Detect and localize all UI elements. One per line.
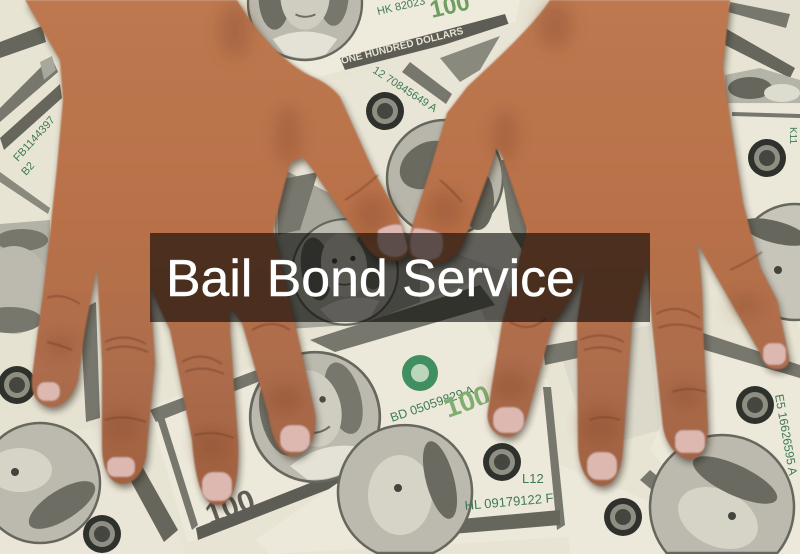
top bill [228,0,520,78]
lower centre bill [255,377,570,554]
lower centre bill: HL 09179122 F [464,490,554,513]
left hand shading [44,2,390,461]
title: Bail Bond Service [166,249,575,307]
left hand knuckle creases [47,175,378,438]
central bill: 100 [440,379,494,424]
lower centre bill: L12 [522,471,544,486]
right hand knuckle creases [440,180,762,420]
left hand fingernails [37,224,408,501]
top-left bills: B2 [19,160,37,178]
second bill with seal: 12 70845649 A [370,64,440,115]
central bill: BD 05059829 A [388,383,476,425]
right upper bills: K11 [787,127,798,144]
top bill: ONE HUNDRED DOLLARS [340,26,465,67]
under-thumb bill [275,165,520,332]
central bill [148,283,525,543]
top-left bills [0,26,62,300]
right upper bills [725,0,800,330]
portrait: lower right [650,435,794,554]
lower right bills [543,325,800,554]
lower right bills: E5 16626595 A [772,393,800,476]
left hand [25,0,408,505]
portrait: between thumbs [387,120,503,236]
right hand shading [427,1,761,443]
second bill with seal [300,20,530,300]
right hand fingernails [410,228,786,480]
right hand [408,0,789,486]
portrait: bottom left [0,423,102,543]
bottom-left bill [0,423,185,554]
central bill: 100 [201,483,259,532]
title band [150,233,650,322]
portrait: lower centre [338,425,472,553]
top-left bills: FB1144397 [11,114,58,164]
left middle bill with portrait and seal [0,246,100,445]
